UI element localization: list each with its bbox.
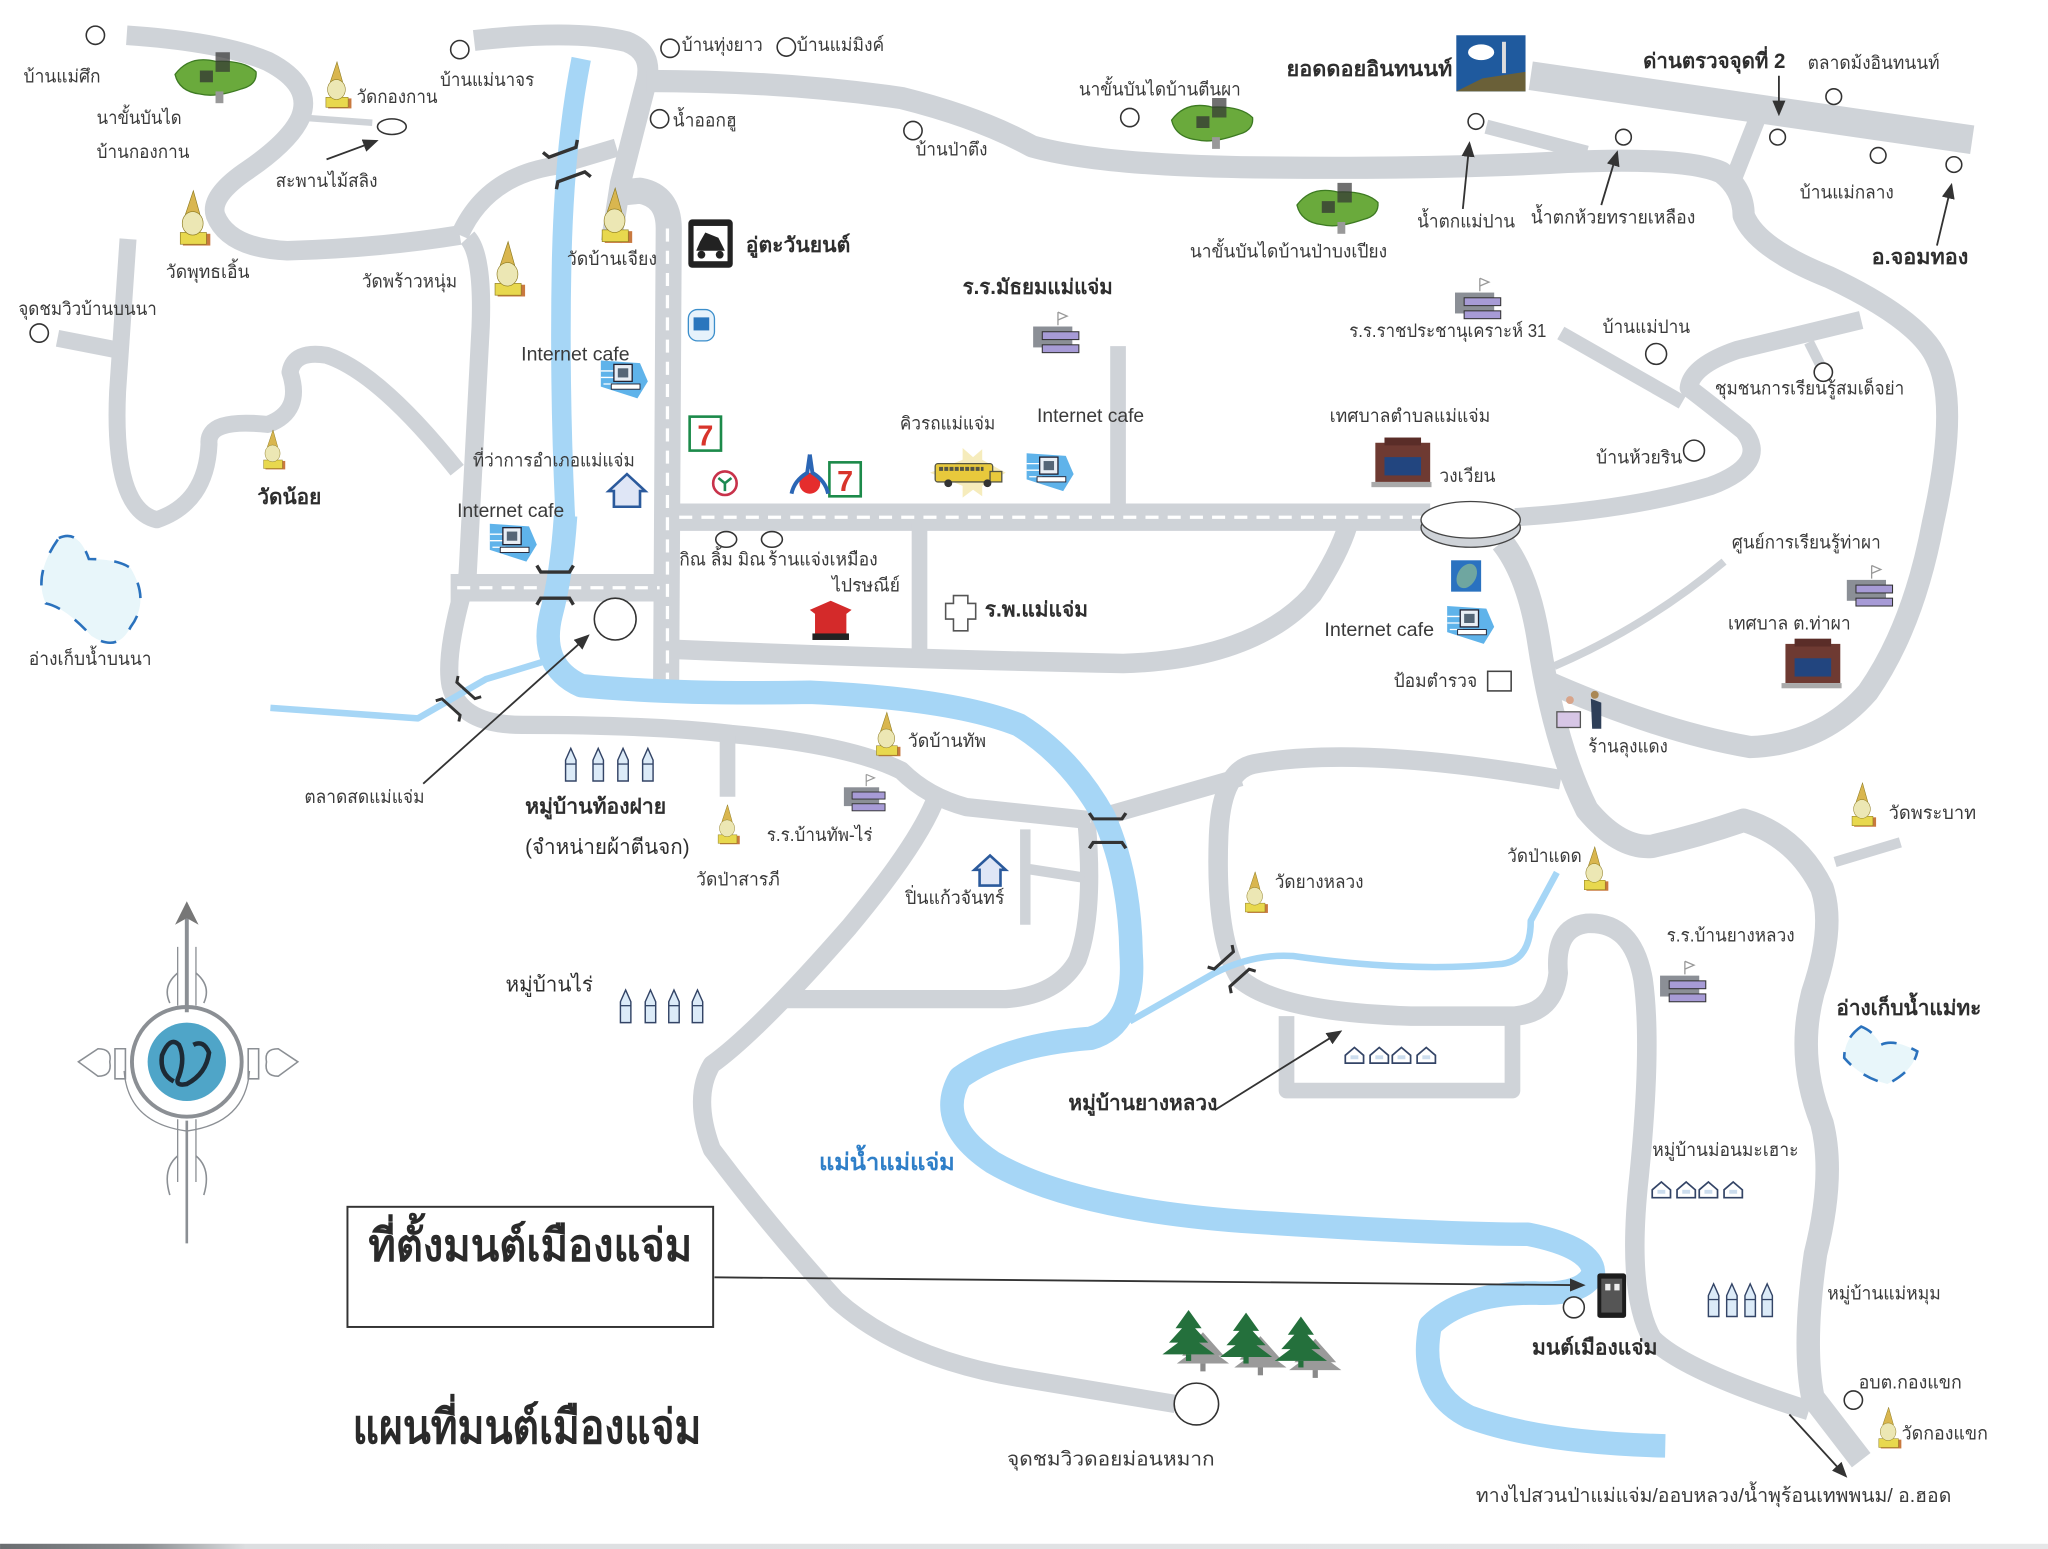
place labels: วัดบ้านเจียง [567, 248, 657, 269]
place labels: ชุมชนการเรียนรู้สมเด็จย่า [1715, 376, 1904, 400]
place labels: บ้านแม่ศึก [24, 65, 101, 86]
place labels: ศูนย์การเรียนรู้ท่าผา [1732, 532, 1881, 554]
place labels: Internet cafe [521, 343, 630, 365]
place labels: อู่ตะวันยนต์ [746, 233, 850, 259]
village houses: แม่หมุม [1708, 1284, 1772, 1317]
place labels: คิวรถแม่แจ่ม [900, 413, 995, 434]
village houses: ยางหลวง [1345, 1047, 1435, 1063]
place labels: (จำหน่ายผ้าตีนจก) [525, 836, 690, 859]
place labels: บ้านทุ่งยาว [682, 34, 763, 57]
place labels: ร.พ.แม่แจ่ม [985, 598, 1088, 621]
title: แผนที่มนต์เมืองแจ่ม [353, 1393, 701, 1453]
place labels: บ้านแม่กลาง [1800, 182, 1894, 203]
place labels: ร.ร.บ้านทัพ-ไร่ [767, 824, 873, 845]
place labels: ตลาดสดแม่แจ่ม [304, 786, 425, 807]
place labels: วัดกองแขก [1902, 1422, 1988, 1443]
scan edge strip [0, 1544, 2048, 1549]
place labels: เทศบาลตำบลแม่แจ่ม [1330, 405, 1490, 426]
place labels: วัดกองกาน [357, 86, 438, 107]
roundabout [1421, 502, 1520, 547]
place labels: กิณ ลิ้ม มิณ [679, 546, 765, 570]
river: แม่น้ำแม่แจ่ม [270, 59, 1665, 1446]
place labels: ปิ่นแก้วจันทร์ [904, 885, 1005, 908]
place labels: วัดบ้านทัพ [908, 730, 986, 751]
icon: blue bank badge [688, 310, 714, 341]
place labels: Internet cafe [1324, 619, 1434, 641]
place labels: หมู่บ้านยางหลวง [1068, 1091, 1217, 1117]
place labels: วัดป่าสารภี [696, 869, 780, 890]
place labels: บ้านกองกาน [97, 141, 190, 162]
place labels: นาขั้นบันได [97, 104, 182, 128]
place labels: วงเวียน [1439, 465, 1496, 486]
place labels: อบต.กองแขก [1859, 1371, 1962, 1392]
village houses: หมู่บ้านไร่ [620, 990, 703, 1023]
place labels: น้ำออกฮู [673, 107, 737, 132]
village houses: ท้องฝาย [566, 748, 653, 781]
river label: แม่น้ำแม่แจ่ม [819, 1144, 955, 1175]
bridges [436, 140, 1256, 993]
place labels: วัดพระบาท [1889, 802, 1976, 823]
place labels: หมู่บ้านไร่ [505, 972, 593, 997]
place labels: Internet cafe [1037, 405, 1144, 427]
village houses: ม่อนมะเฮาะ [1652, 1182, 1742, 1198]
icon: people at shop [1557, 691, 1601, 729]
place labels: ไปรษณีย์ [830, 575, 900, 596]
place labels: เทศบาล ต.ท่าผา [1728, 613, 1851, 634]
place labels: นาขั้นบันไดบ้านป่าบงเปียง [1190, 237, 1387, 261]
place labels: จุดชมวิวบ้านบนนา [18, 298, 157, 321]
icon: tow truck [688, 219, 733, 268]
reservoir: บนนา [41, 536, 140, 643]
place labels: อ่างเก็บน้ำแม่ทะ [1836, 992, 1981, 1020]
place labels: น้ำตกห้วยทรายเหลือง [1531, 203, 1695, 227]
place labels: วัดป่าแดด [1507, 845, 1582, 866]
icons: rice terraces [175, 52, 1378, 234]
location callout box: ที่ตั้งมนต์เมืองแจ่ม [368, 1212, 692, 1270]
place labels: ทางไปสวนป่าแม่แจ่ม/ออบหลวง/น้ำพุร้อนเทพพนม/ อ.ฮอด [1476, 1481, 1951, 1508]
place labels: ด่านตรวจจุดที่ 2 [1643, 45, 1785, 74]
place labels: หมู่บ้านแม่หมุม [1827, 1283, 1941, 1306]
location callout box [347, 1207, 713, 1327]
icon: green bank logo [713, 471, 737, 495]
icon: hospital cross [946, 596, 976, 631]
icons: internet cafes [490, 360, 1494, 644]
icon: pine trees [1162, 1310, 1341, 1378]
icons: municipal buildings [1371, 438, 1842, 688]
place labels: Internet cafe [457, 500, 564, 522]
icons: schools [844, 278, 1893, 1002]
place labels: วัดพุทธเอิ้น [166, 258, 250, 284]
place labels: วัดน้อย [257, 485, 321, 509]
place labels: จุดชมวิวดอยม่อนหมาก [1007, 1448, 1215, 1471]
icon: leaf badge [1451, 560, 1481, 592]
place labels: อ.จอมทอง [1872, 246, 1968, 269]
icon: fuel station logo [792, 455, 828, 494]
place labels: ร้านลุงแดง [1588, 735, 1668, 758]
place labels: หมู่บ้านม่อนมะเฮาะ [1652, 1139, 1798, 1161]
place labels: นาขั้นบันไดบ้านตีนผา [1079, 75, 1241, 99]
temples [180, 62, 1901, 1448]
icon: doi inthanon photo [1456, 35, 1526, 91]
pointer arrows [327, 76, 1951, 1476]
place labels: ร.ร.บ้านยางหลวง [1667, 925, 1795, 946]
place labels: บ้านห้วยริน [1596, 447, 1683, 468]
reservoir: แม่ทะ [1844, 1027, 1917, 1084]
place labels: วัดพร้าวหนุ่ม [362, 270, 457, 293]
icon: mon muang chaem hotel [1597, 1273, 1626, 1318]
icons: blue-roof houses [609, 474, 1006, 886]
place labels: หมู่บ้านท้องฝาย [525, 795, 666, 821]
place labels: ร.ร.มัธยมแม่แจ่ม [963, 276, 1113, 299]
place labels: น้ำตกแม่ปาน [1417, 207, 1516, 231]
icon: police box [1488, 671, 1511, 691]
place labels: บ้านแม่ปาน [1603, 316, 1691, 337]
icons: 7-eleven [690, 417, 861, 498]
place labels: บ้านแม่นาจร [440, 69, 534, 90]
icon: school bus [930, 448, 1006, 498]
place labels: ร.ร.ราชประชานุเคราะห์ 31 [1349, 320, 1546, 343]
compass [78, 901, 298, 1243]
place labels: ที่ว่าการอำเภอแม่แจ่ม [473, 447, 635, 470]
place labels: ยอดดอยอินทนนท์ [1287, 57, 1452, 81]
place labels: วัดยางหลวง [1275, 871, 1364, 892]
place labels: ร้านแจ่งเหมือง [768, 549, 878, 570]
place labels: บ้านแม่มิงค์ [797, 34, 884, 55]
place labels: สะพานไม้สลิง [276, 170, 377, 191]
icon: post box [810, 601, 852, 640]
place labels: ตลาดม้งอินทนนท์ [1808, 52, 1940, 73]
place labels: อ่างเก็บน้ำบนนา [29, 645, 152, 669]
place labels: ป้อมตำรวจ [1394, 670, 1477, 691]
place labels: มนต์เมืองแจ่ม [1532, 1335, 1657, 1359]
place labels: บ้านป่าตึง [916, 138, 987, 159]
